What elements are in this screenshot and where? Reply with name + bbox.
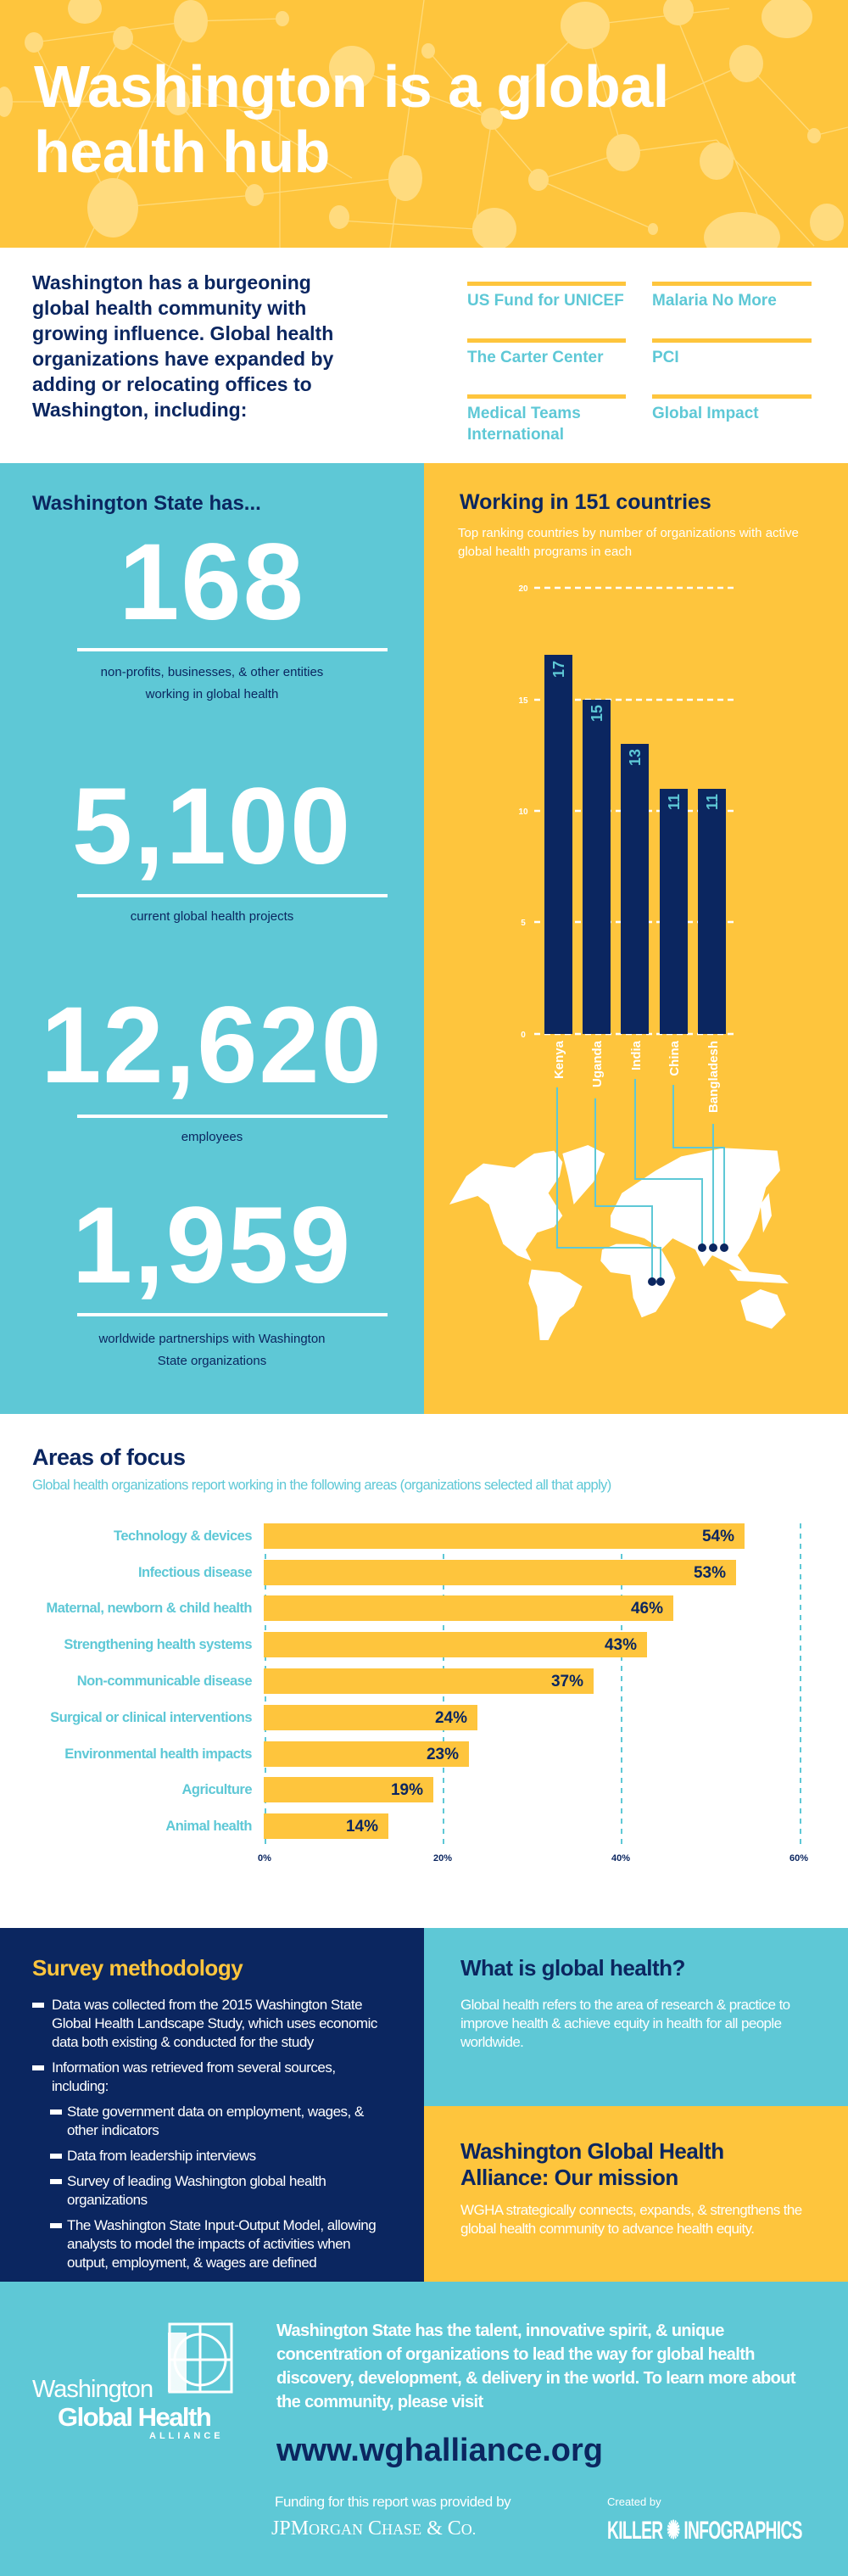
organization list: Medical Teams [467, 405, 581, 422]
survey bullet list: Survey of leading Washington global health organizations [67, 2173, 326, 2208]
panel: what is global health: What is global health? [460, 1955, 685, 1981]
panel: working in 151 countries [424, 463, 848, 1414]
footer [0, 2282, 848, 2576]
stats heading: Washington State has... [32, 492, 261, 515]
country bar chart and map: 0 [521, 1031, 526, 1040]
logo: WGHA [32, 2322, 232, 2441]
areas of focus bar chart: Surgical or clinical interventions [50, 1710, 252, 1725]
areas of focus bar chart: Agriculture [181, 1782, 252, 1797]
panel: what is global health [424, 1928, 848, 2106]
areas of focus bar chart: 37% [551, 1673, 583, 1690]
areas of focus bar chart: 53% [694, 1564, 726, 1582]
stat 5,100 [72, 766, 388, 924]
country bar chart and map: 11 [666, 794, 683, 810]
organization list: Malaria No More [652, 292, 777, 310]
panel: survey methodology [0, 1928, 424, 2282]
country bar chart and map: 11 [704, 794, 721, 810]
areas of focus bar chart: Animal health [165, 1819, 252, 1834]
chart heading: Working in 151 countries [460, 490, 711, 514]
organization list: US Fund for UNICEF [467, 292, 624, 310]
country bar chart and map: India [629, 1040, 644, 1070]
panel: WGHA mission: Alliance: Our mission [460, 2165, 678, 2190]
areas of focus bar chart: 23% [427, 1746, 459, 1763]
country bar chart and map: China [667, 1040, 682, 1076]
stat 1,959 [72, 1185, 388, 1368]
areas of focus bar chart: 14% [346, 1818, 378, 1836]
funding credit: Funding for this report was provided by [275, 2494, 510, 2510]
survey bullet list: Data from leadership interviews [67, 2148, 256, 2164]
areas of focus bar chart: 0% [258, 1853, 271, 1864]
JPMorgan logo text: JPMORGAN CHASE & CO. [271, 2517, 476, 2540]
survey bullet list: Data was collected from the 2015 Washington State Global Health Landscape Study, which uses economic data both existing & conducted for the study [52, 1997, 377, 2050]
stat 168: 168 [119, 522, 305, 643]
areas of focus bar chart: Non-communicable disease [77, 1674, 252, 1689]
areas of focus bar chart: 60% [789, 1853, 808, 1864]
panel: Washington State stats: current global health projects [131, 909, 293, 924]
areas of focus bar chart: Environmental health impacts [64, 1746, 252, 1762]
areas of focus bar chart: Technology & devices [114, 1528, 252, 1544]
stat 168: non-profits, businesses, & other entities [101, 665, 323, 679]
organization list: The Carter Center [467, 349, 604, 366]
areas of focus bar chart: 20% [433, 1853, 452, 1864]
stat 5,100: 5,100 [72, 766, 352, 887]
panel: WGHA mission: Washington Global Health [460, 2138, 724, 2164]
country bar chart and map: Bangladesh [706, 1041, 721, 1113]
closing statement: Washington State has the talent, innovative spirit, & unique concentration of organizations to lead the way for global health discovery, development, & delivery in the world. To learn more about the community, please visit [276, 2322, 795, 2411]
panel: WGHA mission [424, 2106, 848, 2282]
panel: Washington State stats: employees [181, 1130, 243, 1144]
country bar chart and map [449, 584, 789, 1340]
country bar chart and map: 15 [518, 696, 528, 706]
stat 12,620: 12,620 [41, 985, 383, 1106]
areas of focus bar chart: Maternal, newborn & child health [46, 1601, 252, 1616]
stat 1,959: 1,959 [72, 1185, 352, 1306]
panel: what is global health: Global health refers to the area of research & practice to improve health & achieve equity in health for all people worldwide. [460, 1997, 790, 2050]
panel: Washington State stats [0, 463, 424, 1414]
country bar chart and map: 13 [627, 749, 644, 766]
country bar chart and map: 10 [518, 807, 528, 817]
areas of focus bar chart: 46% [631, 1600, 663, 1618]
areas of focus bar chart: 24% [435, 1709, 467, 1727]
country bar chart and map: Kenya [552, 1040, 566, 1079]
panel: WGHA mission: WGHA strategically connects, expands, & strengthens the global health community to advance health equity. [460, 2202, 802, 2237]
logo: WGHA: Washington [32, 2376, 153, 2403]
country bar chart and map: Uganda [590, 1040, 605, 1087]
stat 1,959: State organizations [158, 1354, 266, 1368]
organization list: PCI [652, 349, 679, 366]
Killer Infographics logo: KILLER ✺ INFOGRAPHICS [607, 2517, 802, 2545]
chart subtitle: Top ranking countries by number of organizations with active global health programs in each [458, 526, 799, 559]
areas of focus bar chart: 43% [605, 1636, 637, 1654]
decorative network pattern [0, 0, 848, 248]
header banner [0, 0, 848, 248]
country bar chart and map: 20 [518, 584, 528, 594]
title: Washington is a global [34, 53, 669, 120]
survey bullet list: Information was retrieved from several sources, including: [52, 2059, 336, 2094]
survey bullet list: The Washington State Input-Output Model, allowing analysts to model the impacts of activities when output, employment, & wages are defined [67, 2217, 376, 2271]
areas of focus bar chart: Strengthening health systems [64, 1637, 252, 1652]
survey bullet list [32, 1997, 377, 2271]
country bar chart and map: 17 [550, 661, 567, 678]
intro text: Washington has a burgeoning global health community with growing influence. Global health organizations have expanded by adding or relocating offices to Washington, including: [32, 271, 333, 421]
logo: WGHA: ALLIANCE [149, 2431, 224, 2441]
title [34, 53, 669, 185]
logo: WGHA: Global Health [58, 2402, 210, 2432]
stat 1,959: worldwide partnerships with Washington [98, 1332, 326, 1346]
areas of focus bar chart: 40% [611, 1853, 630, 1864]
organization list: International [467, 426, 564, 444]
areas of focus bar chart [46, 1523, 808, 1864]
areas of focus bar chart: 19% [391, 1781, 423, 1799]
title: health hub [34, 119, 330, 185]
organization list: Global Impact [652, 405, 759, 422]
stat 168 [77, 522, 388, 701]
country bar chart and map: 5 [521, 919, 526, 928]
created by: Created by [607, 2495, 661, 2508]
URL: www.wghalliance.org [276, 2433, 603, 2468]
country bar chart and map: 15 [589, 705, 605, 722]
areas of focus bar chart: Infectious disease [138, 1565, 252, 1580]
areas of focus heading: Areas of focus [32, 1444, 186, 1470]
areas of focus bar chart: 54% [702, 1528, 734, 1545]
survey heading: Survey methodology [32, 1955, 243, 1981]
stat 168: working in global health [146, 687, 278, 701]
organization list [467, 282, 812, 444]
survey bullet list: State government data on employment, wages, & other indicators [67, 2104, 364, 2138]
areas of focus subtitle: Global health organizations report working in the following areas (organizations selected all that apply) [32, 1478, 611, 1493]
